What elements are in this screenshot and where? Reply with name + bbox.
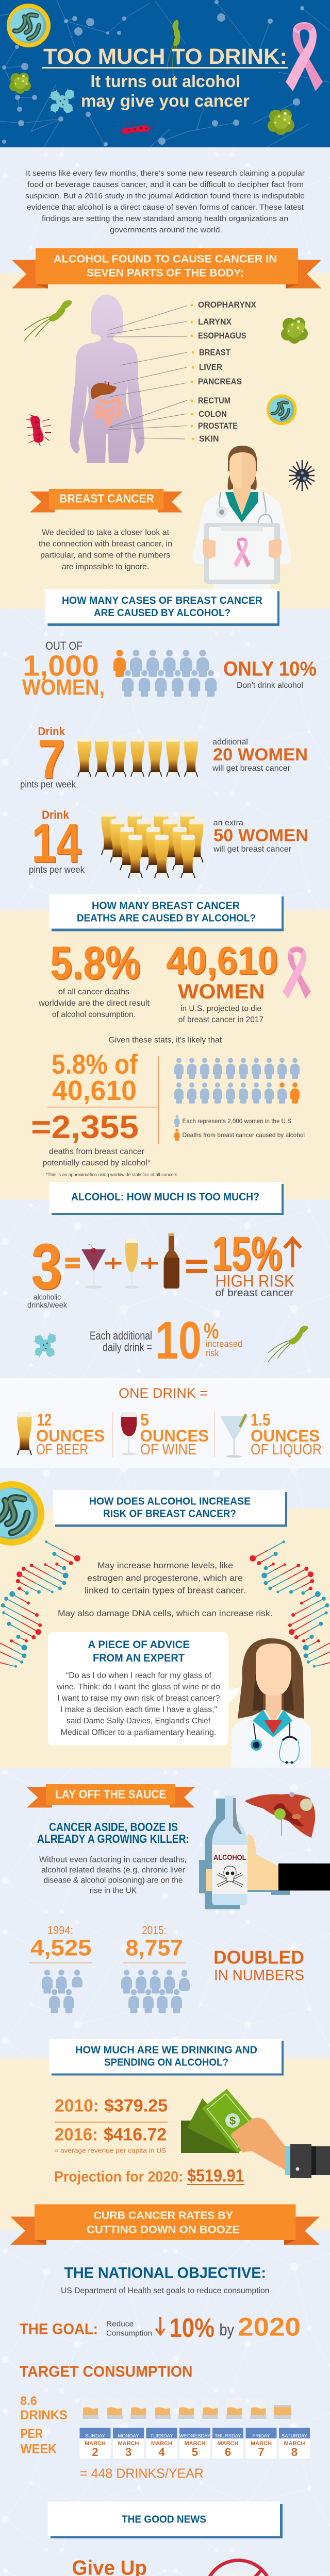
heading box: HOW MANY CASES OF BREAST CANCER: [62, 595, 263, 606]
icon: beer bottle: [164, 1233, 179, 1289]
organ labels: LIVER: [199, 362, 222, 372]
week calendar: MARCH: [218, 2441, 239, 2447]
stat: additional 20 women: will get breast cancer: [212, 764, 291, 773]
hand holding alcohol bottle illustration: [199, 1795, 330, 1909]
stat: each daily drink 10 percent: daily drink =: [103, 1341, 152, 1354]
organ labels: PROSTATE: [198, 421, 238, 431]
text block: rise in the UK: [90, 1887, 137, 1895]
heading: CANCER ASIDE, BOOZE IS: [49, 1820, 178, 1834]
stat: drink 7 pints: 7: [38, 728, 65, 790]
week calendar: MARCH: [251, 2441, 272, 2447]
stat: 15 percent high risk: 15%: [213, 1228, 283, 1281]
stat: 5.8 percent: worldwide are the direct result: [38, 999, 150, 1008]
stat: each daily drink 10 percent: Each additional: [90, 1329, 152, 1342]
banner: alcohol found to cause cancer: ALCOHOL FOUND TO CAUSE CANCER IN: [54, 253, 277, 265]
stats: revenue per capita: = average revenue per capita in US: [54, 2146, 167, 2155]
week calendar: SATURDAY: [282, 2433, 308, 2439]
heading box: HOW MUCH ARE WE DRINKING AND: [75, 2044, 257, 2056]
organ labels: BREAST: [199, 347, 231, 358]
legend: [174, 1115, 305, 1141]
the goal statement: by: [220, 2320, 234, 2339]
panel: the good news: [38, 2502, 283, 2576]
organ pointer lines: [107, 306, 187, 439]
speech bubble: expert advice: A PIECE OF ADVICE: [88, 1639, 190, 1651]
text block: how alcohol raises risk: linked to certain types of breast cancer.: [85, 1586, 246, 1595]
heading: national objective: [61, 2265, 269, 2295]
text block: how alcohol raises risk: estrogen and progesterone, which are: [87, 1573, 243, 1583]
text block: how alcohol raises risk: May increase hormone levels, like: [97, 1561, 233, 1570]
text block: disease & alcohol poisoning) are on the: [43, 1876, 183, 1885]
heading box: [50, 1182, 284, 1215]
liver illustration: [245, 1792, 315, 1838]
icon: green worm: [24, 300, 72, 341]
icon: wine glass: [121, 1412, 137, 1455]
hand holding alcohol bottle illustration: ALCOHOL: [213, 1853, 246, 1862]
speech bubble: expert advice: [48, 1632, 241, 1745]
icon: blue cell: [34, 1333, 56, 1357]
heading box: [53, 1490, 287, 1527]
icon: green worm: [147, 19, 203, 76]
panel: curb cancer rates: [10, 2204, 320, 2481]
stat: 15 percent high risk: of breast cancer: [216, 1287, 293, 1299]
text block: how alcohol raises risk: May also damage DNA cells, which can increase risk.: [58, 1608, 272, 1618]
organ labels: COLON: [199, 409, 227, 419]
wine measure: [140, 1410, 209, 1458]
organ labels: PANCREAS: [198, 377, 242, 386]
calculation: 5.8 percent of 40,610 equals 2,355: [31, 1049, 177, 1177]
stats: deaths 1994 vs 2015: 8,757: [126, 1935, 183, 1961]
label: 8.6 drinks per week: [20, 2394, 68, 2456]
week calendar: MONDAY: [118, 2433, 139, 2439]
icons: seven beers: [77, 737, 198, 777]
heading box: ARE CAUSED BY ALCOHOL?: [94, 607, 230, 619]
week calendar: MARCH: [185, 2441, 206, 2447]
week calendar: 5: [192, 2446, 198, 2459]
stat: extra 50 women: an extra: [213, 819, 243, 827]
stat: out of 1,000 women: [22, 639, 105, 700]
stat: each daily drink 10 percent: [90, 1311, 242, 1370]
speech bubble: expert advice: said Dame Sally Davies, England's Chief: [67, 1717, 211, 1725]
stats: deaths 1994 vs 2015: [29, 1924, 186, 1963]
stat: 5.8 percent: of all cancer deaths: [58, 988, 129, 996]
stat: drink 7 pints: Drink: [38, 725, 65, 738]
label: 8.6 drinks per week: 8.6: [20, 2394, 37, 2408]
title: [42, 44, 288, 110]
stat: each daily drink 10 percent: %: [204, 1318, 219, 1344]
icon: blue cell: [49, 89, 75, 113]
heading box: RISK OF BREAST CANCER?: [103, 1509, 236, 1520]
panel: drinking and spending: [50, 2039, 330, 2185]
heading: [37, 1820, 189, 1845]
text block: breast cancer intro: particular, and some of the numbers: [40, 551, 170, 560]
icon: green cell cluster right: [268, 109, 294, 135]
stats: revenue per capita: [54, 2096, 244, 2185]
stat: 40,610 women: of breast cancer in 2017: [178, 1015, 263, 1024]
plus sign: [105, 1258, 122, 1269]
liquor measure: [251, 1410, 322, 1458]
heading: national objective: US Department of Health set goals to reduce consumption: [61, 2286, 269, 2295]
heading: national objective: THE NATIONAL OBJECTIVE:: [64, 2265, 266, 2281]
speech bubble: expert advice: “Do as I do when I reach for my glass of: [66, 1671, 212, 1680]
text block: intro: suspicion. But a 2016 study in the journal Addiction found there is indisputable: [25, 192, 305, 200]
week calendar: MARCH: [118, 2441, 139, 2447]
calculation: 5.8 percent of 40,610 equals 2,355: 40,610: [52, 1075, 137, 1106]
icon: beer glass: [17, 1412, 32, 1455]
equals sign: [186, 1260, 207, 1273]
stat: 3 drinks per week: drinks/week: [27, 1301, 67, 1310]
stat: 40,610 women: WOMEN: [178, 980, 265, 1003]
icon: red worm: [26, 415, 51, 446]
week calendar: 7: [258, 2446, 265, 2459]
panel: seven parts of the body: [12, 248, 321, 589]
icons: 8.6 glasses: [82, 2398, 291, 2419]
panel: lay off the sauce: [27, 1784, 330, 2013]
the goal statement: 2020: [238, 2312, 301, 2341]
beer measure: OF BEER: [36, 1442, 88, 1458]
text block: breast cancer intro: are impossible to ignore.: [62, 563, 149, 571]
stat: each daily drink 10 percent: risk: [206, 1348, 219, 1358]
text block: intro: food or beverage causes cancer, and it can be difficult to decipher fact from: [27, 180, 304, 189]
week calendar: [79, 2428, 310, 2459]
stat: 40,610 women: 40,610: [167, 940, 279, 983]
stat: only 10%: ONLY 10%: [223, 657, 317, 680]
banner: CUTTING DOWN ON BOOZE: [87, 2224, 240, 2236]
organ labels: ESOPHAGUS: [198, 331, 246, 341]
illustration: hand with cash: [181, 2089, 330, 2178]
stat: drink 7 pints: [20, 725, 76, 791]
week calendar: WEDNESDAY: [179, 2433, 211, 2439]
stat: out of 1,000 women: WOMEN,: [22, 675, 105, 700]
icon: petri dish: [267, 395, 297, 425]
stat: 40,610 women: [166, 939, 279, 1024]
panel: one drink equals: [17, 1385, 322, 1458]
week calendar: MARCH: [284, 2441, 305, 2447]
heading box: [50, 2039, 284, 2075]
heading: ONE DRINK =: [119, 1385, 208, 1401]
stat: 40,610 women: in U.S. projected to die: [180, 1005, 261, 1013]
stat: drink 14 pints: 14: [32, 813, 82, 875]
stats: revenue per capita: 2016:: [55, 2125, 98, 2144]
organ labels: [191, 300, 257, 444]
week calendar: 6: [225, 2446, 231, 2459]
label: 8.6 drinks per week: PER: [21, 2427, 43, 2441]
wine measure: 5: [140, 1410, 149, 1429]
stat: doubled in numbers: [213, 1946, 304, 1984]
legend: Deaths from breast cancer caused by alcohol: [183, 1131, 305, 1139]
text block: intro: evidence that alcohol is a direct cause of seven forms of cancer. These latest: [27, 203, 304, 212]
stat: 3 drinks per week: alcoholic: [34, 1293, 61, 1301]
the goal statement: THE GOAL:: [20, 2320, 98, 2338]
icon: cocktail: [81, 1244, 106, 1289]
stats: revenue per capita: $379.25: [104, 2096, 168, 2115]
week calendar: SUNDAY: [85, 2433, 106, 2439]
banner: [10, 2204, 320, 2245]
organ labels: LARYNX: [198, 317, 232, 327]
icon: martini glass: [220, 1414, 249, 1458]
liquor measure: OUNCES: [251, 1427, 320, 1445]
heading box: [47, 2502, 283, 2538]
organ labels: OROPHARYNX: [198, 300, 257, 310]
heading box: HOW MANY BREAST CANCER: [92, 901, 240, 912]
heading box: HOW DOES ALCOHOL INCREASE: [89, 1496, 251, 1507]
text block: breast cancer intro: the connection with breast cancer, in: [39, 540, 172, 548]
speech bubble: expert advice: I make a decision each time I have a glass,": [60, 1705, 217, 1714]
text block: breast cancer intro: We decided to take a closer look at: [42, 529, 170, 537]
title: It turns out alcohol: [91, 72, 240, 91]
calculation: 5.8 percent of 40,610 equals 2,355: 5.8% of: [52, 1049, 138, 1080]
stats: revenue per capita: Projection for 2020:: [54, 2169, 183, 2185]
stat: only 10%: Don't drink alcohol: [237, 681, 303, 690]
calculation: 5.8 percent of 40,610 equals 2,355: *This is an approximation using worldwide statistics of all cancers: [46, 1172, 177, 1177]
title: TOO MUCH TO DRINK:: [43, 44, 287, 69]
wine measure: OF WINE: [140, 1442, 196, 1458]
stat: doubled in numbers: IN NUMBERS: [214, 1967, 304, 1984]
stat: doubled in numbers: DOUBLED: [213, 1946, 304, 1968]
heading box: DEATHS ARE CAUSED BY ALCOHOL?: [77, 913, 256, 924]
female doctor illustration: [232, 1638, 311, 1768]
week calendar: MARCH: [85, 2441, 106, 2447]
text block: [39, 1856, 187, 1895]
icon: petri dish: [7, 4, 51, 47]
heading: ALREADY A GROWING KILLER:: [37, 1832, 189, 1845]
text block: Without even factoring in cancer deaths,: [39, 1856, 187, 1864]
text block: intro: governments around the world.: [110, 226, 222, 234]
stat: extra 50 women: [213, 819, 308, 854]
stat: drink 14 pints: 14: [31, 812, 81, 874]
stat: 3 drinks per week: 3: [31, 1231, 62, 1302]
beer measure: [36, 1410, 105, 1458]
beer measure: OUNCES: [36, 1427, 105, 1445]
stat: drink 7 pints: 7: [39, 729, 66, 791]
text block: breast cancer intro: [39, 529, 172, 571]
icon: pink ribbon: [286, 22, 323, 91]
calculation: 5.8 percent of 40,610 equals 2,355: potentially caused by alcohol*: [42, 1159, 151, 1167]
week calendar: TUESDAY: [150, 2433, 173, 2439]
calculation: 5.8 percent of 40,610 equals 2,355: deaths from breast cancer: [49, 1147, 145, 1156]
banner: breast cancer: [30, 489, 183, 512]
stat: 3 drinks per week: 3: [32, 1232, 63, 1303]
people icons: 1 in 10: [113, 650, 217, 697]
panel: header: [0, 0, 330, 147]
banner: CURB CANCER RATES BY: [94, 2210, 233, 2222]
heading box: SPENDING ON ALCOHOL?: [104, 2057, 228, 2068]
stat: each daily drink 10 percent: increased: [206, 1338, 242, 1349]
icon: no drinking sign: [205, 2561, 272, 2576]
the goal statement: [20, 2312, 301, 2343]
text: given these stats: Given these stats, it's likely that: [108, 1036, 222, 1045]
beer measure: 12: [37, 1410, 52, 1429]
icon: green cell cluster: [9, 73, 31, 94]
body silhouette with liver and colon: [70, 295, 144, 463]
text block: intro: [25, 169, 305, 234]
legend: Each represents 2,000 women in the U.S: [183, 1117, 291, 1125]
week calendar: 8: [291, 2446, 298, 2459]
wine measure: OUNCES: [140, 1427, 209, 1445]
stat: each daily drink 10 percent: 10: [155, 1311, 202, 1370]
speech bubble: expert advice: I want to raise my own risk of breast cancer?: [57, 1694, 220, 1703]
stat: additional 20 women: 20 WOMEN: [213, 745, 308, 765]
week calendar: 2: [92, 2446, 98, 2459]
heading box: ALCOHOL: HOW MUCH IS TOO MUCH?: [71, 1191, 259, 1203]
stat: only 10%: [223, 657, 317, 690]
icons: fourteen beers: [101, 811, 203, 878]
speech bubble: expert advice: FROM AN EXPERT: [93, 1652, 185, 1664]
liquor measure: 1.5: [251, 1410, 270, 1429]
text block: intro: It seems like every few months, there's some new research claiming a popular: [26, 169, 305, 178]
DNA strand right: [250, 1540, 330, 1668]
DNA strand left: [0, 1540, 80, 1668]
stat: extra 50 women: will get breast cancer: [213, 845, 292, 854]
icon: red worm: [121, 121, 153, 137]
label: 8.6 drinks per week: DRINKS: [20, 2408, 68, 2422]
heading box: [50, 894, 284, 931]
week calendar: 4: [158, 2446, 165, 2459]
icon: black spiky cell: [289, 460, 315, 491]
stat: 5.8 percent: [38, 938, 150, 1019]
stat: extra 50 women: 50 WOMEN: [213, 826, 308, 845]
panel: how many deaths: [31, 894, 311, 1177]
organ labels: RECTUM: [198, 396, 230, 405]
stat: 15 percent high risk: 15%: [212, 1227, 282, 1280]
stat: additional 20 women: [212, 738, 308, 773]
stat: 5.8 percent: 5.8%: [51, 939, 141, 990]
week calendar: MARCH: [151, 2441, 172, 2447]
heading box: THE GOOD NEWS: [122, 2514, 206, 2526]
stats: revenue per capita: 2010:: [55, 2096, 99, 2115]
speech bubble: expert advice: Medical Officer to a parliamentary hearing.: [61, 1728, 217, 1737]
stat: 5.8 percent: of alcohol consumption.: [52, 1010, 136, 1019]
icon: green worm: [268, 1326, 308, 1362]
illustration: hand with cash: $: [229, 2114, 236, 2127]
banner: breast cancer: BREAST CANCER: [59, 492, 154, 505]
banner: LAY OFF THE SAUCE: [55, 1788, 166, 1801]
panel: how many cases: [20, 589, 317, 878]
text block: alcohol related deaths (e.g. chronic liver: [41, 1866, 186, 1874]
organ labels: SKIN: [199, 434, 219, 444]
stat: 40,610 women: 40,610: [166, 939, 278, 982]
icon: green cell cluster: [281, 317, 308, 344]
week calendar: FRIDAY: [252, 2433, 270, 2439]
stat: 15 percent high risk: HIGH RISK: [216, 1272, 294, 1290]
stats: revenue per capita: $519.91: [187, 2166, 244, 2185]
stat: drink 7 pints: pints per week: [20, 779, 76, 789]
week calendar: 3: [125, 2446, 131, 2459]
text block: intro: findings are setting the new standard among health organizations an: [42, 214, 288, 223]
stat: 5.8 percent: 5.8%: [50, 938, 140, 989]
the goal statement: Consumption: [106, 2329, 152, 2338]
equals sign: [65, 1258, 80, 1268]
icon: champagne flute: [125, 1238, 139, 1289]
panel: how alcohol increases risk: [0, 1481, 330, 1768]
stat: drink 14 pints: pints per week: [29, 865, 85, 875]
label: 8.6 drinks per week: WEEK: [21, 2442, 57, 2456]
stats: revenue per capita: $416.72: [104, 2125, 167, 2144]
people icons: 8,757: [121, 1970, 190, 2013]
people icons: 4,525: [42, 1970, 82, 2013]
title: may give you cancer: [81, 91, 250, 110]
week calendar: THURSDAY: [214, 2433, 241, 2439]
banner: alcohol found to cause cancer: SEVEN PARTS OF THE BODY:: [87, 267, 244, 279]
panel: how much is too much: [27, 1182, 308, 1370]
heading box: [45, 589, 279, 626]
heading: target consumption: TARGET CONSUMPTION: [20, 2363, 193, 2380]
calculation: 5.8 percent of 40,610 equals 2,355: =2,355: [31, 1109, 139, 1145]
icon: petri dish: [0, 1481, 44, 1546]
banner: [27, 1784, 195, 1807]
stat: additional 20 women: additional: [212, 738, 248, 747]
stat: out of 1,000 women: 1,000: [23, 649, 99, 682]
plus sign: [141, 1258, 158, 1269]
stats: deaths 1994 vs 2015: 2015:: [142, 1924, 167, 1937]
stats: deaths 1994 vs 2015: 1994:: [47, 1924, 73, 1937]
stats: deaths 1994 vs 2015: 4,525: [30, 1935, 92, 1961]
stat: out of 1,000 women: OUT OF: [45, 639, 82, 652]
stat: 448 drinks per year: = 448 DRINKS/YEAR: [80, 2466, 204, 2481]
people icons: 20 grid: [174, 1058, 300, 1104]
the goal statement: Reduce: [106, 2319, 134, 2329]
text block: how alcohol raises risk: [58, 1561, 272, 1618]
speech bubble: expert advice: wine. Think: do I want the glass of wine or do: [56, 1683, 220, 1691]
doctor illustration with clipboard: [192, 446, 291, 589]
icon: pink ribbon: [283, 946, 311, 998]
stat: drink 14 pints: Drink: [42, 808, 70, 821]
banner: alcohol found to cause cancer: [12, 248, 321, 289]
the goal statement: 10%: [169, 2313, 214, 2343]
